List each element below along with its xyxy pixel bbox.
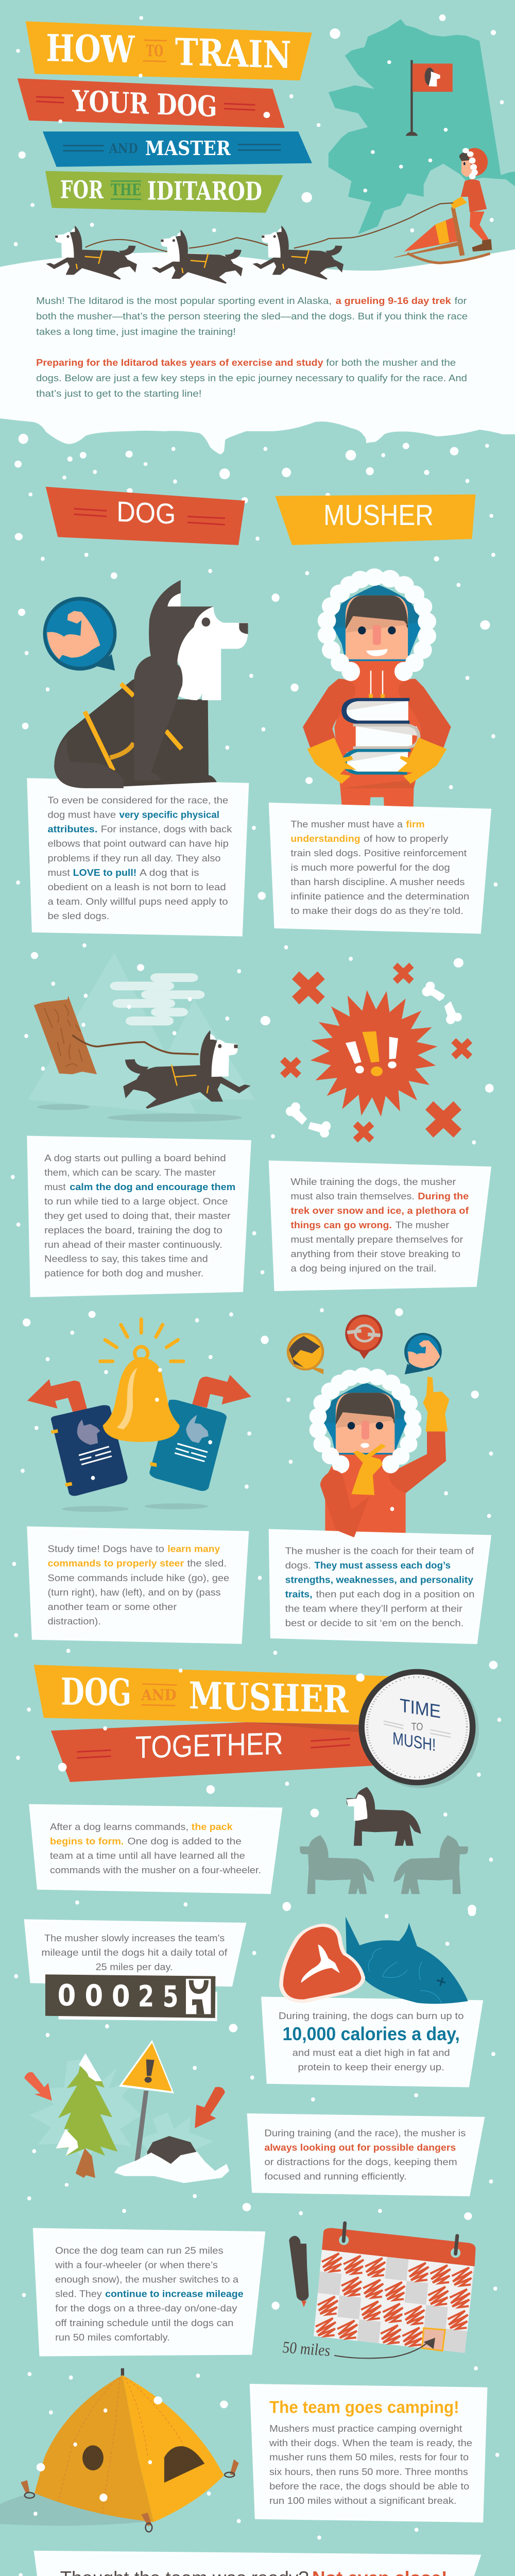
odometer: 2 (138, 1979, 154, 2013)
intro paragraph 2: that’s just to get to the starting line! (36, 388, 202, 399)
silhouette dog right (393, 1835, 468, 1894)
panel: musher coach: traits, (285, 1589, 313, 1600)
panel: team goes camping (250, 2384, 487, 2522)
panel: 50 miles schedule: with a four-wheeler (or when there’s (55, 2260, 218, 2270)
banner: Musher (275, 495, 475, 545)
text: dog attributes: a team. Only willful pups need apply to (47, 896, 228, 907)
text: dog attributes: problems if they run all day. They also (47, 853, 221, 863)
fish (346, 1917, 468, 2004)
snowflakes (18, 553, 495, 789)
panel: dog commands: another team or some other (47, 1601, 177, 1612)
bubble: puzzle (287, 1333, 324, 1375)
speech bubble: muscle (43, 597, 116, 671)
text: dog attributes: LOVE to pull! (73, 867, 136, 878)
banner: Dog and Musher: DOG (61, 1670, 131, 1715)
snowflakes (16, 826, 497, 1093)
panel: 50 miles schedule: run 50 miles comfortably. (55, 2332, 170, 2343)
text: dog attributes: elbows that point outward can have hip (47, 838, 229, 849)
snowflakes (14, 14, 504, 246)
danger burst background (29, 2059, 141, 2164)
panel: 50 miles schedule (33, 2228, 265, 2357)
not even close and checklist (14, 2460, 497, 2576)
second step text and third step icons (11, 1134, 491, 1512)
banner: Together: TOGETHER (135, 1726, 283, 1765)
rope to board (72, 1035, 199, 1054)
banner: Dog and Musher: AND (141, 1687, 176, 1704)
panel: musher trains: During the (418, 1191, 469, 1201)
command books (51, 1400, 227, 1496)
panel: 50 miles schedule: enough snow), the musher switches to a (55, 2274, 238, 2285)
panel: 50 miles schedule: Once the dog team can run 25 miles (55, 2245, 224, 2256)
panel: dog starts pulling (27, 1136, 251, 1297)
explosion burst (311, 990, 437, 1116)
panel: dog commands: Study time! Dogs have to (47, 1544, 164, 1554)
banner: How to Train: TO (146, 41, 163, 60)
panel: dog physical attributes (27, 778, 249, 936)
gang line rope (85, 203, 453, 251)
text: dog attributes: dog must have (47, 809, 116, 820)
white snow band at top (0, 249, 515, 454)
intro paragraph 1 (36, 296, 468, 337)
panel: dog starts pulling: them, which can be scary. The master (44, 1167, 216, 1178)
panel: dog commands: commands to properly steer (47, 1558, 184, 1569)
intro paragraph 2 (36, 358, 467, 399)
panel: dog starts pulling: run ahead of their master continuously. (44, 1240, 222, 1250)
panel: dog starts pulling: A dog starts out pulling a board behind (44, 1153, 226, 1163)
panel: pack forms: One dog is added to the (127, 1836, 242, 1846)
panel: 50 miles schedule: continue to increase mileage (105, 2289, 244, 2299)
intro paragraph 1: for (455, 296, 467, 306)
text: dog attributes: A dog that is (140, 867, 199, 878)
third step (12, 1367, 493, 1644)
panel: musher trains: things can go wrong. (290, 1219, 392, 1230)
banner: Together (51, 1722, 377, 1782)
panel: dog commands: the sled. (187, 1558, 227, 1569)
panel: pack forms: the pack (192, 1821, 233, 1832)
calendar (314, 2223, 475, 2353)
background mountains (28, 953, 254, 1115)
panel: musher trains: must also train themselves. (290, 1191, 415, 1201)
panel: musher understanding (269, 803, 491, 934)
snowflakes (14, 1908, 495, 2183)
text: dog attributes: be sled dogs. (47, 910, 109, 921)
intro and section headers (14, 296, 493, 545)
stopwatch (358, 1669, 479, 1788)
banner: Dog: DOG (116, 495, 176, 530)
silhouette dog left (300, 1835, 374, 1894)
rock with snow (114, 2136, 229, 2183)
panel: dog starts pulling: patience for both dog and musher. (44, 1268, 203, 1279)
odometer (45, 1974, 215, 2018)
text: dog attributes (47, 795, 232, 921)
panel: dog starts pulling: Needless to say, this takes time and (44, 1253, 208, 1264)
panel: dangers (247, 2113, 485, 2196)
thinking musher (310, 1367, 449, 1538)
banner: Dog and Musher (34, 1665, 394, 1725)
panel: dog starts pulling: calm the dog and encourage them (70, 1181, 235, 1192)
panel: dog starts pulling: to run while tied to a large object. Once (44, 1196, 228, 1207)
banner: for the Iditarod: THE (111, 181, 141, 199)
text: musher understanding: firm (406, 819, 425, 829)
sled dog 1 (46, 226, 137, 280)
snowflakes (16, 1649, 501, 1913)
dog and musher together (16, 1649, 501, 1913)
sitting husky (54, 580, 248, 788)
text: dog attributes: To even be considered for the race, the (47, 795, 228, 806)
banner: for the Iditarod: FOR (60, 175, 104, 204)
broken bones (286, 981, 462, 1138)
stopwatch: MUSH! (392, 1728, 436, 1755)
panel: pack forms: team at a time until all have learned all the (50, 1850, 245, 1861)
snowflakes (11, 1134, 476, 1361)
shadows (37, 1104, 242, 1122)
hero section: IDITAROD (147, 176, 262, 206)
panel: dog starts pulling: must (44, 1181, 66, 1192)
banner: and Master: MASTER (145, 137, 231, 160)
pine tree (56, 2053, 117, 2178)
callout: not even close (34, 2551, 481, 2576)
panel: dog commands (27, 1527, 249, 1644)
warning sign (119, 2040, 174, 2161)
shadows under books (62, 1503, 208, 1512)
odometer: 0 (58, 1978, 76, 2012)
dark standing husky (347, 1787, 421, 1846)
odometer: 5 (163, 1979, 178, 2014)
banner: and Master (43, 131, 312, 167)
panel: dog starts pulling: replaces the board, training the dog to (44, 1225, 222, 1235)
panel: musher trains: The musher (396, 1219, 449, 1230)
steak (279, 1924, 365, 2003)
text: dog attributes: must (47, 867, 70, 878)
sled dog 3 (252, 226, 344, 280)
banner: How to Train: HOW (46, 26, 135, 72)
banner: How to Train: TRAIN (175, 30, 291, 77)
text: dog attributes: attributes. (47, 824, 97, 835)
panel: pack forms: begins to form. (50, 1836, 124, 1846)
wooden board (34, 996, 97, 1074)
danger arrows (25, 2072, 225, 2128)
panel: calories (261, 1997, 483, 2087)
dust cloud (110, 973, 204, 1026)
panel: mileage: mileage until the dogs hit a daily total of (41, 1947, 227, 1958)
banner: How to Train (26, 21, 312, 80)
panel: 50 miles schedule: for the dogs on a three-day on/one-day (55, 2303, 237, 2314)
map of Alaska (329, 19, 515, 247)
musher with books (303, 568, 451, 811)
panel: musher trains (269, 1160, 491, 1291)
stopwatch: TO (411, 1720, 423, 1733)
mileage, food and dangers (14, 1908, 495, 2196)
panel: dog commands: learn many (167, 1544, 220, 1554)
banner: for the Iditarod (45, 171, 283, 213)
first step row (18, 553, 495, 936)
panel: 50 miles schedule: sled. They (55, 2289, 102, 2299)
running dog (123, 1030, 251, 1109)
panel: dog commands: Some commands include hike (go), gee (47, 1572, 229, 1583)
odometer: 0 (112, 1979, 130, 2013)
text: musher understanding (290, 819, 469, 916)
banner: Your Dog: YOUR DOG (72, 84, 217, 124)
panel: mileage: The musher slowly increases the team's (44, 1933, 225, 1943)
text: dog attributes: For instance, dogs with back (101, 824, 232, 835)
second step illustrations (16, 826, 497, 1143)
text: musher understanding: of how to properly (364, 833, 449, 844)
tent shadow and body (0, 2368, 239, 2532)
text: dog attributes: obedient on a leash is not born to lead (47, 882, 226, 892)
panel: pack forms: commands with the musher on a four-wheeler. (50, 1865, 261, 1875)
panel: pack forms (29, 1804, 282, 1894)
panel: 50 miles schedule: off training schedule until the dogs can (55, 2317, 233, 2328)
bubble: muscle small (404, 1333, 442, 1375)
snowflakes (14, 2460, 497, 2576)
odometer: 0 (85, 1978, 103, 2013)
hero section (14, 14, 515, 284)
panel: pack forms: After a dog learns commands, (50, 1821, 188, 1832)
banner: Your Dog (18, 78, 285, 128)
sled (393, 207, 490, 263)
command arrows (27, 1375, 251, 1412)
text: musher understanding: understanding (290, 833, 360, 844)
musher with sled (451, 148, 492, 251)
bubble: chain (345, 1315, 383, 1359)
bell (100, 1319, 183, 1442)
text: musher understanding: The musher must have a (290, 819, 403, 829)
banner: Dog (46, 487, 245, 545)
panel: musher coach (269, 1529, 491, 1644)
panel: mileage: 25 miles per day. (96, 1962, 173, 1972)
stopwatch: TIME (400, 1694, 441, 1722)
intro paragraph 1: takes a long time, just imagine the training! (36, 326, 236, 337)
snowflakes (22, 2183, 499, 2457)
panel: dog starts pulling: they get used to doing that, their master (44, 1211, 231, 1221)
handwritten note with arrow (282, 2337, 435, 2360)
handwritten note with arrow: 50 miles (282, 2338, 330, 2360)
snowflakes (14, 434, 493, 541)
stack of books (341, 698, 420, 774)
danger burst right (138, 2112, 214, 2165)
panel: dog commands: distraction). (47, 1616, 101, 1626)
panel: dog commands: (turn right), haw (left), and on by (pass (47, 1587, 221, 1598)
banner: and Master: AND (109, 141, 138, 156)
panel: musher coach: dogs. (285, 1560, 311, 1570)
flag with dog (406, 60, 453, 136)
red X marks (280, 963, 472, 1143)
sled dog 2 (152, 229, 243, 284)
text: dog attributes: very specific physical (119, 809, 219, 820)
pen (289, 2236, 308, 2307)
schedule and camping (0, 2183, 499, 2532)
panel: dangers: focused and running efficiently. (264, 2171, 407, 2182)
panel: mileage (24, 1919, 246, 2021)
snowflakes (12, 1368, 493, 1637)
